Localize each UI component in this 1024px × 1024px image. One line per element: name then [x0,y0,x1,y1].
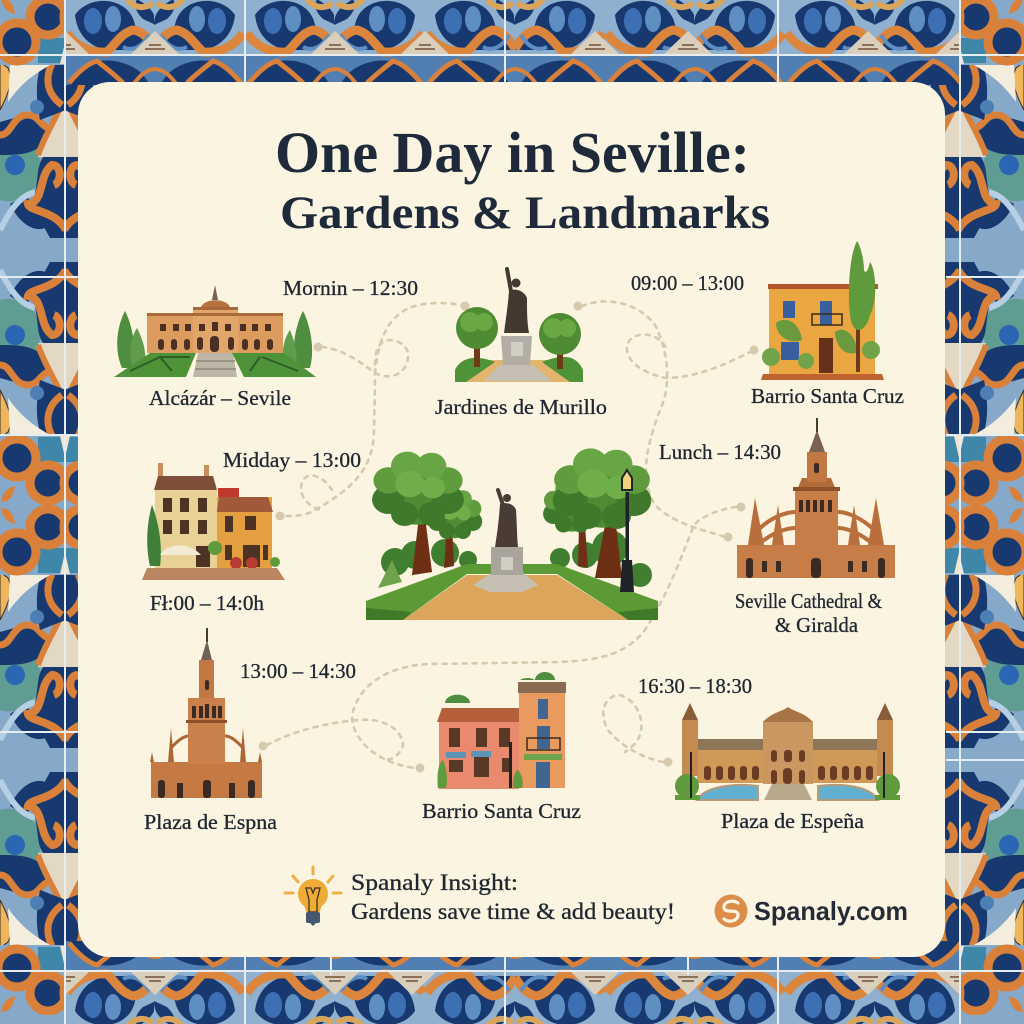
cream panel [78,82,945,957]
label: Seville Cathedral: Seville Cathedral & [735,589,882,613]
illustration: Barrio Santa Cruz house [761,241,884,380]
label: Barrio Santa Cruz: Barrio Santa Cruz [751,384,904,408]
illustration: Jardines de Murillo statue [455,269,583,382]
illustration: Plaza de Espana [675,703,900,800]
label: Plaza de Espna: Plaza de Espna [144,810,278,834]
left tiles [0,0,93,1015]
label: Barrio Santa Cruz: Barrio Santa Cruz [422,799,581,823]
label: Alcazar: Alcázár – Sevile [149,386,291,410]
right tiles [931,0,1024,1015]
insight text [351,870,675,924]
title: Gardens & Landmarks [280,187,770,239]
label: Jardines de Murillo: Jardines de Murillo [435,395,607,419]
illustration: tower church [150,628,262,798]
time label: 13:00: 13:00 – 14:30 [240,659,356,683]
bottom tile band [41,941,984,1024]
label: cafe time: Fł:00 – 14:0h [150,591,264,615]
illustration: Barrio Santa Cruz pink houses [437,672,566,789]
label: Seville Cathedral [735,589,882,637]
time label: morning: Mornin – 12:30 [283,276,418,300]
illustration: plaza houses with cafe [142,463,285,580]
top tile band [41,0,984,85]
label: Seville Cathedral: & Giralda [775,613,859,637]
time label: midday: Midday – 13:00 [223,448,361,472]
insight text: Gardens save time & add beauty! [351,899,675,924]
label: Plaza de Espena: Plaza de Espeña [721,809,865,833]
title [275,120,770,239]
title: One Day in Seville: [275,120,750,185]
logo: Spanaly: Spanaly.com [754,896,908,926]
dotted route paths [258,301,758,772]
illustration: central garden with statue [366,448,658,620]
illustration: Alcazar palace [114,285,316,377]
illustration: Seville Cathedral and Giralda [737,418,895,578]
icon: light bulb [285,867,341,926]
time label: 09:00: 09:00 – 13:00 [631,271,744,295]
time label: lunch: Lunch – 14:30 [659,440,781,464]
time label: 16:30: 16:30 – 18:30 [638,674,752,698]
insight text: Spanaly Insight: [351,870,518,895]
